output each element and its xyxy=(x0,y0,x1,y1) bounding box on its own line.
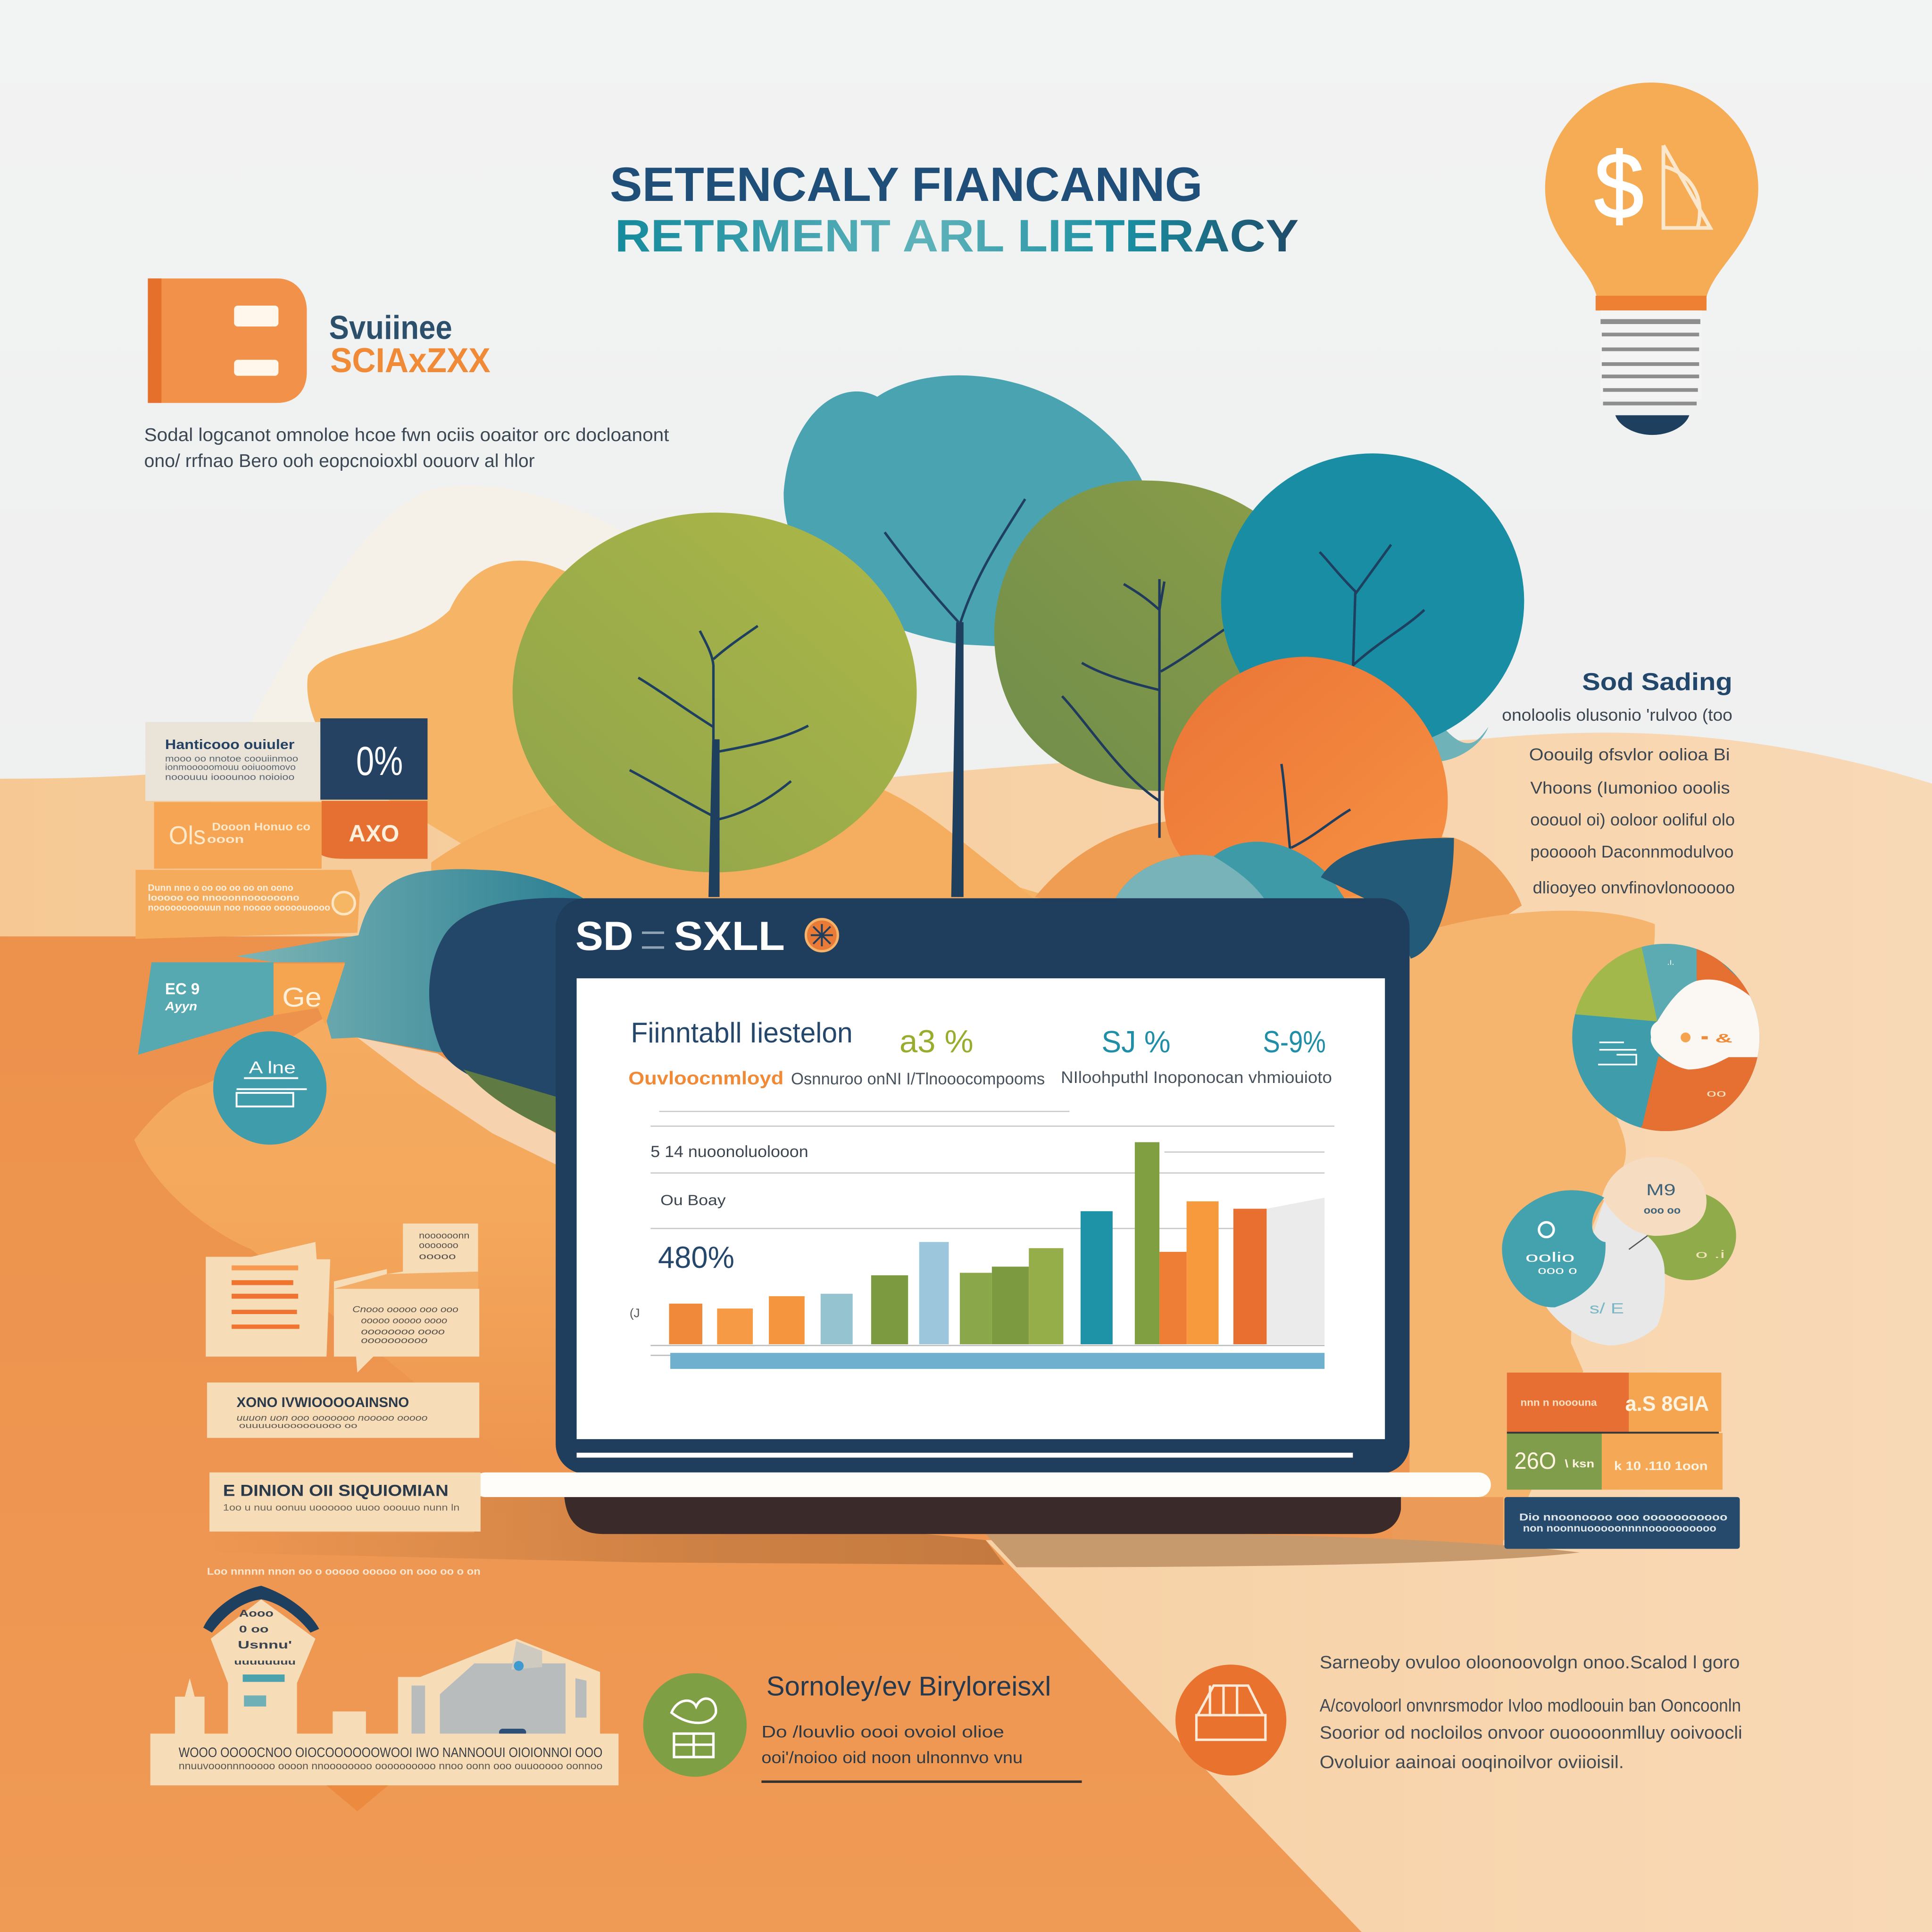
note: speech bubble: noooooonn xyxy=(419,1230,469,1240)
panel: right stat table: 26O xyxy=(1514,1448,1556,1474)
text block: intro: ono/ rrfnao Bero ooh eopcnoioxbl oouorv al hlor xyxy=(144,451,535,471)
screen heading: S-9% xyxy=(1263,1024,1326,1059)
panel: left stat rows: Ols xyxy=(169,820,206,849)
bar chart: 480% xyxy=(658,1240,734,1274)
text block: bottom right: Sarneoby ovuloo oloonoovolgn onoo.Scalod l goro xyxy=(1320,1653,1740,1673)
illustration: buildings: WOOO OOOOCNOO OIOCOOOOOOWOOI IWO NANNOOUI OIOIONNOI OOO xyxy=(179,1745,602,1760)
illustration: buildings: uuuuuuuu xyxy=(234,1658,296,1666)
illustration: buildings: nnuuvooonnnooooo oooon nnoooooooo oooooooooo nnoo oonn ooo ouuooooo oonnoo xyxy=(179,1761,602,1772)
pie chart: & xyxy=(1715,1031,1732,1045)
text block: bottom right: Ovoluior aainoai ooqinoilvor oviioisil. xyxy=(1320,1753,1624,1773)
pie chart: oo xyxy=(1707,1088,1726,1099)
text block: intro xyxy=(144,425,669,471)
laptop base xyxy=(473,1473,1491,1534)
venn diagram: oolio xyxy=(1525,1250,1574,1265)
icon: orange book B xyxy=(148,278,307,403)
panel: left stat rows: nooooooooouun noo noooo ooooouoooo xyxy=(148,902,330,913)
note: list xyxy=(206,1242,330,1357)
heading: savings: SCIAxZXX xyxy=(330,341,491,380)
illustration: buildings: Usnnu' xyxy=(238,1639,292,1651)
note: savings row: XONO IVWIOOOOAINSNO xyxy=(237,1395,409,1410)
panel: right stat table: Dio nnoonoooo ooo ooooooooooo xyxy=(1519,1512,1727,1523)
icon: teal circle: A lne xyxy=(249,1058,296,1077)
venn diagram xyxy=(1502,1157,1736,1346)
note: speech bubble: oooooooooo xyxy=(361,1335,427,1345)
pie chart xyxy=(1572,944,1759,1131)
tree: green large xyxy=(513,513,917,897)
text block: green callout: ooi'/noioo oid noon ulnonnvo vnu xyxy=(761,1749,1023,1767)
text block: right column: Vhoons (Iumonioo ooolis xyxy=(1530,778,1730,797)
illustration: buildings: 0 oo xyxy=(239,1624,268,1635)
screen heading: Fiinntabll Iiestelon xyxy=(631,1017,853,1049)
title: RETRMENT ARL LIETERACY xyxy=(615,211,1299,261)
note: speech bubble: Cnooo ooooo ooo ooo xyxy=(352,1304,458,1314)
panel: laptop xyxy=(556,898,1409,1474)
laptop header: SXLL xyxy=(674,914,785,959)
venn diagram: M9 xyxy=(1646,1181,1676,1199)
note: education row xyxy=(209,1473,481,1532)
ribbon: teal arrow banner xyxy=(138,869,585,1055)
title: SETENCALY FIANCANNG xyxy=(610,158,1203,211)
note: speech bubble xyxy=(334,1224,479,1373)
callout: orange circle icon xyxy=(1175,1665,1286,1775)
note: education row: E DINION OII SIQUIOMIAN xyxy=(223,1482,449,1499)
text block: right column: poooooh Daconnmodulvoo xyxy=(1530,842,1733,861)
text block: right column: ooouol oi) ooloor ooliful olo xyxy=(1530,810,1735,829)
tree: orange xyxy=(1115,657,1454,958)
note: savings row: uuuon uon ooo ooooooo nooooo ooooo xyxy=(237,1413,427,1423)
heading: savings: Svuiinee xyxy=(329,308,452,346)
panel: left notes xyxy=(206,1224,481,1577)
note: education row: 1oo u nuu oonuu uoooooo uuoo ooouuo nunn ln xyxy=(223,1503,459,1513)
text block: bottom right: Soorior od nocloilos onvoor ouoooonmlluy ooivoocli xyxy=(1320,1723,1742,1743)
text block: right column: Ooouilg ofsvlor oolioa Bi xyxy=(1529,745,1730,764)
screen heading xyxy=(628,1017,1332,1089)
venn diagram: ooo oo xyxy=(1644,1205,1681,1216)
laptop header xyxy=(575,914,838,959)
panel: left stat rows: Dunn nno o oo oo oo oo on oono xyxy=(148,883,293,893)
ribbon: teal arrow banner: EC 9 xyxy=(165,980,200,998)
panel: left stat rows: nooouuu iooounoo noioioo xyxy=(165,772,294,782)
icon: lightbulb: $ xyxy=(1594,133,1644,238)
illustration: buildings: Aooo xyxy=(239,1608,274,1619)
note: savings row: ouuuuouooooouooo oo xyxy=(239,1422,358,1430)
panel: left stat rows: Hanticooo ouiuler xyxy=(165,737,294,752)
text block: right column: onoloolis olusonio 'rulvoo (too xyxy=(1502,705,1732,724)
text block: intro: Sodal logcanot omnoloe hcoe fwn ociis ooaitor orc docloanont xyxy=(144,425,669,445)
note: savings row xyxy=(207,1382,479,1438)
screen heading: a3 % xyxy=(899,1024,974,1059)
laptop header: SD xyxy=(575,914,633,959)
bar chart: (J xyxy=(630,1306,640,1320)
text block: green callout: Do /louvlio oooi ovoiol olioe xyxy=(761,1723,1004,1741)
panel: right stat table: non noonnuooooonnnnoooooooooo xyxy=(1523,1523,1716,1534)
tree: teal right xyxy=(1221,453,1524,762)
panel: right stat table: a.S 8GIA xyxy=(1625,1392,1709,1416)
panel: right stat table: k 10 .110 1oon xyxy=(1614,1458,1708,1473)
icon: lightbulb xyxy=(1545,83,1758,435)
venn diagram: s/ E xyxy=(1590,1300,1624,1317)
bar chart: Ou Boay xyxy=(660,1192,726,1208)
ribbon: teal arrow banner: Ayyn xyxy=(165,999,197,1013)
text block: right column: dliooyeo onvfinovlonooooo xyxy=(1533,878,1735,897)
venn diagram: o .i xyxy=(1695,1248,1725,1260)
panel: left stat rows: 0% xyxy=(356,739,403,784)
illustration: buildings xyxy=(150,1586,618,1811)
text block: bottom right: A/covoloorl onvnrsmodor Ivloo modloouin ban Ooncoonln xyxy=(1320,1696,1741,1715)
note: speech bubble: ooooo ooooo oooo xyxy=(361,1316,447,1325)
text block: right column: Sod Sading xyxy=(1582,668,1732,696)
panel: left stat rows xyxy=(135,718,427,939)
screen heading: NIloohputhl Inoponocan vhmiouioto xyxy=(1061,1068,1332,1087)
panel: left stat rows: AXO xyxy=(349,820,399,847)
bar chart: 5 14 nuoonoluolooon xyxy=(650,1143,808,1161)
note: speech bubble: ooooo xyxy=(419,1251,456,1261)
panel: left stat rows: looooo oo nnooonnoooooono xyxy=(148,893,300,903)
ribbon: teal arrow banner: Ge xyxy=(282,983,322,1013)
panel: right stat table xyxy=(1505,1373,1740,1549)
title xyxy=(610,158,1299,261)
text block: green callout xyxy=(761,1671,1082,1783)
callout: green circle xyxy=(643,1673,747,1777)
note: speech bubble: ooooooo xyxy=(419,1240,458,1250)
text block: green callout: Sornoley/ev Biryloreisxl xyxy=(766,1671,1051,1701)
panel: left stat rows: ionmooooomouu ooiuoomovo xyxy=(165,762,296,772)
panel: left stat rows: mooo oo nnotoe coouiinmoo xyxy=(165,753,298,763)
panel: left stat rows: ooon xyxy=(207,833,244,845)
pie chart: .ı. xyxy=(1667,957,1674,966)
tree: dark green xyxy=(994,481,1325,838)
icon: teal circle xyxy=(213,1031,326,1145)
shape: navy blob behind laptop xyxy=(429,898,591,1133)
panel: left stat rows: Dooon Honuo co xyxy=(212,821,310,833)
screen heading: SJ % xyxy=(1101,1024,1171,1059)
panel: left notes: Loo nnnnn nnon oo o ooooo ooooo on ooo oo o on xyxy=(207,1566,481,1577)
panel: right stat table: nnn n nooouna xyxy=(1521,1398,1597,1408)
bar chart xyxy=(630,1111,1334,1369)
heading: savings xyxy=(329,308,491,380)
note: speech bubble: oooooooo oooo xyxy=(361,1326,445,1336)
tree: teal back xyxy=(783,375,1161,897)
text block: right column xyxy=(1502,668,1735,897)
text block: bottom right xyxy=(1320,1653,1742,1773)
screen heading: Ouvloocnmloyd xyxy=(628,1068,783,1089)
panel: right stat table: \ ksn xyxy=(1565,1457,1594,1470)
screen heading: Osnnuroo onNI I/Tlnooocompooms xyxy=(791,1070,1045,1088)
venn diagram: ooo o xyxy=(1538,1264,1577,1276)
